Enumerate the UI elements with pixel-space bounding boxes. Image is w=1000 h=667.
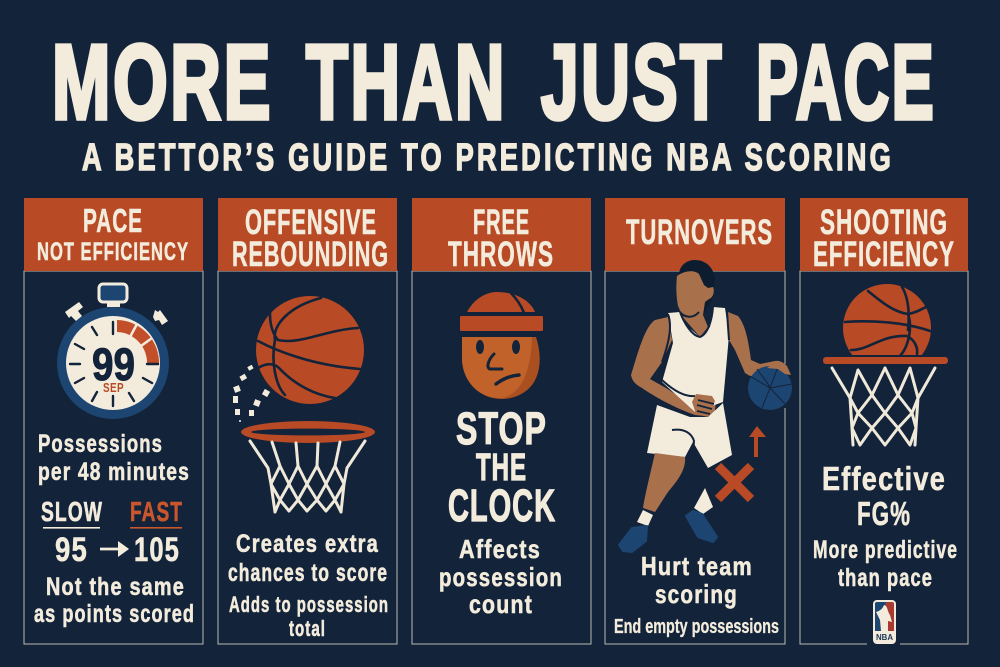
slow to fast scale: SLOW: [41, 496, 103, 527]
panel: pace not efficiency: [24, 198, 203, 644]
text: not the same as points scored: [34, 573, 195, 628]
text: effective fg%: Effective: [822, 460, 946, 497]
icon: stopwatch: SEP: [103, 381, 124, 395]
text: hurt team scoring: scoring: [655, 579, 738, 609]
icon: stopwatch: 99: [92, 339, 135, 390]
icon: ball in hoop: [823, 284, 948, 445]
title: [52, 24, 936, 142]
text: stop the clock: THE: [476, 447, 527, 489]
panel: shooting efficiency: [800, 198, 968, 644]
panel: turnovers: [605, 198, 794, 644]
text: effective fg%: FG%: [857, 495, 911, 532]
header: free throws: FREE: [473, 203, 530, 242]
text: stop the clock: CLOCK: [448, 480, 556, 531]
header: offensive rebounding: REBOUNDING: [232, 235, 389, 274]
title: THAN: [306, 24, 507, 142]
slow to fast scale: [41, 496, 183, 569]
text: creates extra chances to score: chances to score: [228, 559, 388, 587]
panel: free throws: [412, 198, 591, 644]
slow to fast scale: FAST: [130, 496, 183, 527]
text: affects possession count: Affects: [459, 534, 541, 564]
slow to fast scale: 105: [134, 531, 180, 569]
text: end empty possessions: End empty possessions: [614, 616, 779, 638]
panel: offensive rebounding: [218, 198, 397, 644]
header: shooting efficiency: [800, 198, 968, 274]
header: free throws: [412, 198, 591, 274]
header: offensive rebounding: OFFENSIVE: [245, 203, 377, 242]
icon: red x and arrow: [718, 426, 766, 499]
header: pace: [24, 198, 203, 271]
text: adds to possession total: Adds to possession: [229, 592, 389, 617]
text: adds to possession total: total: [289, 616, 326, 641]
text: hurt team scoring: Hurt team: [641, 551, 753, 581]
net: [832, 368, 935, 445]
text: more predictive than pace: than pace: [838, 564, 933, 592]
text: creates extra chances to score: Creates extra: [236, 530, 379, 558]
text: affects possession count: [439, 534, 563, 619]
rim: [823, 357, 948, 364]
slow to fast scale: 95: [55, 531, 88, 569]
text: effective fg%: [822, 460, 946, 532]
text: affects possession count: possession: [439, 562, 563, 592]
icon: league logo: NBA: [876, 633, 893, 642]
text: adds to possession total: [229, 592, 389, 641]
text: possessions per 48 minutes: Possessions: [38, 430, 163, 458]
icon: player dribbling: [619, 260, 794, 552]
text: possessions per 48 minutes: [38, 430, 190, 486]
icon: league logo: [873, 600, 896, 644]
text: stop the clock: [448, 403, 556, 531]
icon: stopwatch: [57, 284, 169, 419]
text: creates extra chances to score: [228, 530, 388, 587]
net: [250, 441, 365, 512]
header: pace: NOT EFFICIENCY: [37, 238, 189, 266]
text: not the same as points scored: Not the same: [46, 573, 185, 601]
icon: frowning face with headband: [460, 292, 543, 399]
text: possessions per 48 minutes: per 48 minutes: [38, 458, 190, 486]
dribbled ball: [748, 366, 792, 410]
header: free throws: THROWS: [448, 235, 554, 274]
header: offensive rebounding: [218, 198, 397, 274]
text: stop the clock: STOP: [456, 403, 547, 454]
hoop rim: [241, 421, 375, 443]
text: not the same as points scored: as points scored: [34, 600, 195, 628]
title: JUST: [541, 24, 724, 142]
header: turnovers: TURNOVERS: [626, 213, 773, 252]
text: affects possession count: count: [469, 589, 533, 619]
header: turnovers: [605, 198, 785, 271]
text: more predictive than pace: [813, 536, 958, 592]
text: hurt team scoring: [641, 551, 753, 609]
icon: basketball above hoop: [233, 296, 375, 512]
title: MORE: [52, 24, 273, 142]
header: pace: PACE: [83, 202, 143, 239]
